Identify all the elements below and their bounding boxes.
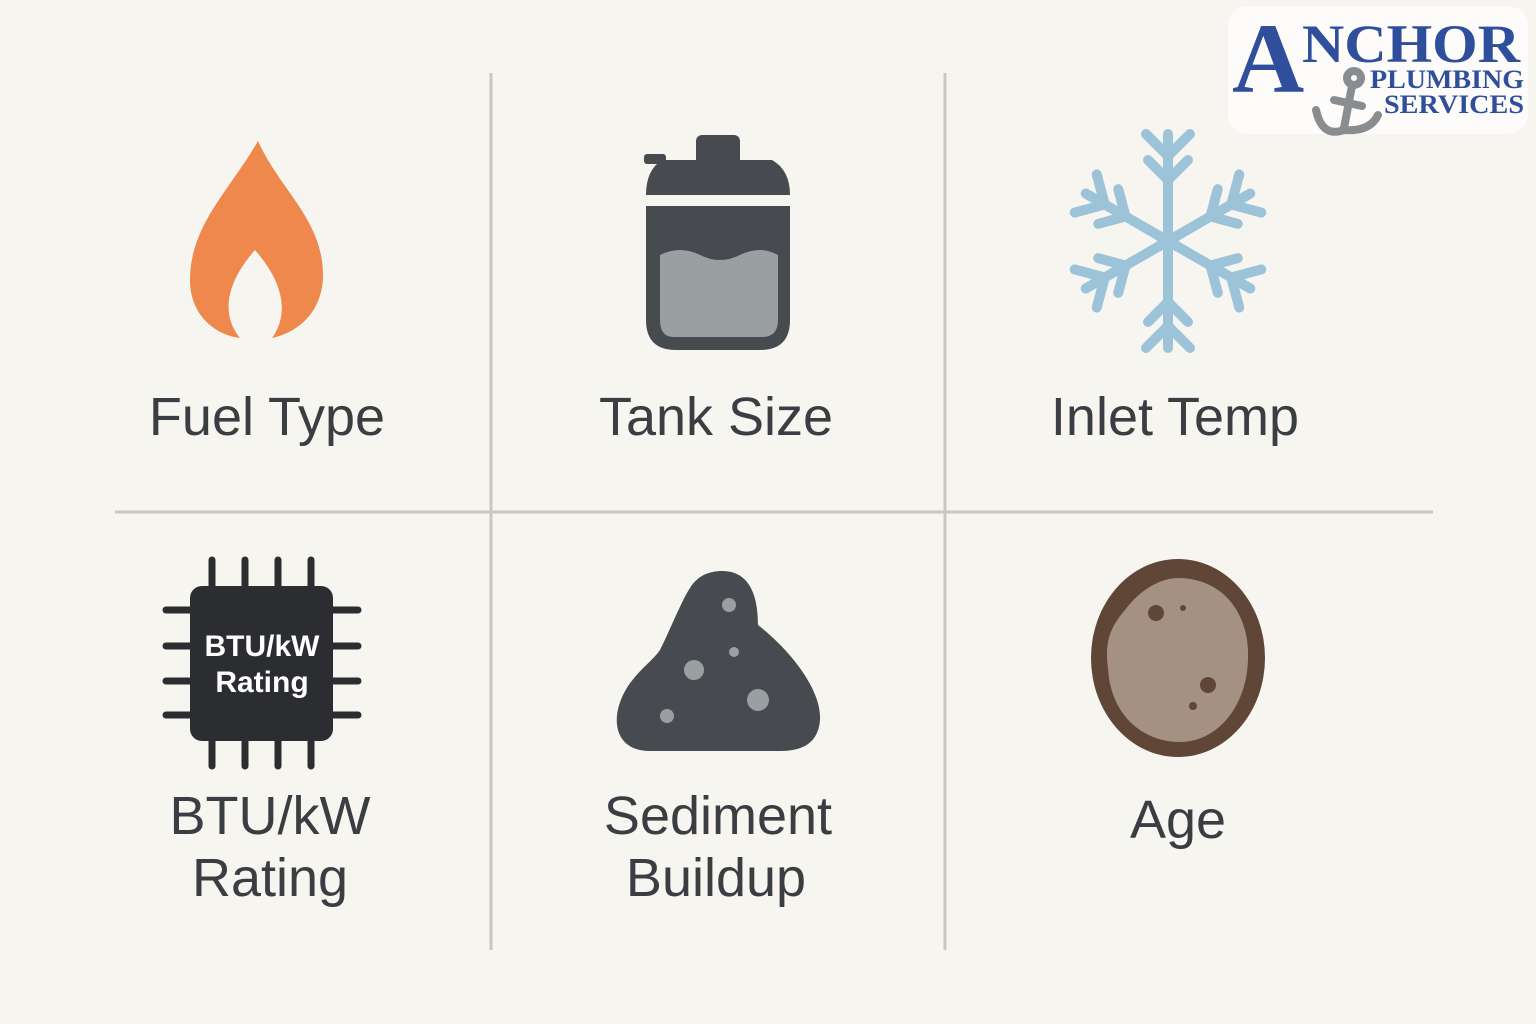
panel: age — [1091, 559, 1265, 850]
panel: btu rating: BTU/kW — [170, 786, 371, 846]
icon: sediment pile — [617, 571, 820, 751]
panel: fuel type — [149, 141, 385, 447]
panel: tank size: Tank Size — [599, 387, 833, 447]
icon: chip — [166, 560, 358, 766]
logo: NCHOR — [1302, 14, 1521, 74]
panel: tank size — [599, 135, 833, 447]
panel: btu rating: BTU/kW — [204, 630, 320, 663]
logo — [1228, 3, 1528, 134]
panel: sediment: Buildup — [626, 848, 806, 908]
icon: anchor — [1316, 71, 1378, 132]
panel: btu rating: Rating — [215, 666, 309, 699]
icon: flame — [190, 141, 323, 338]
panel: sediment — [604, 571, 832, 908]
logo: PLUMBING — [1370, 65, 1524, 94]
panel: btu rating — [166, 560, 371, 908]
panel: inlet temp — [1051, 134, 1299, 447]
logo: A — [1232, 3, 1304, 114]
icon: snowflake — [1075, 134, 1261, 348]
panel: sediment: Sediment — [604, 786, 832, 846]
panel: inlet temp: Inlet Temp — [1051, 387, 1299, 447]
panel: fuel type: Fuel Type — [149, 387, 385, 447]
panel: btu rating: Rating — [192, 848, 348, 908]
icon: tank — [696, 135, 740, 165]
icon: rusty disc — [1091, 559, 1265, 757]
panel: age: Age — [1130, 790, 1226, 850]
logo: SERVICES — [1384, 90, 1524, 119]
